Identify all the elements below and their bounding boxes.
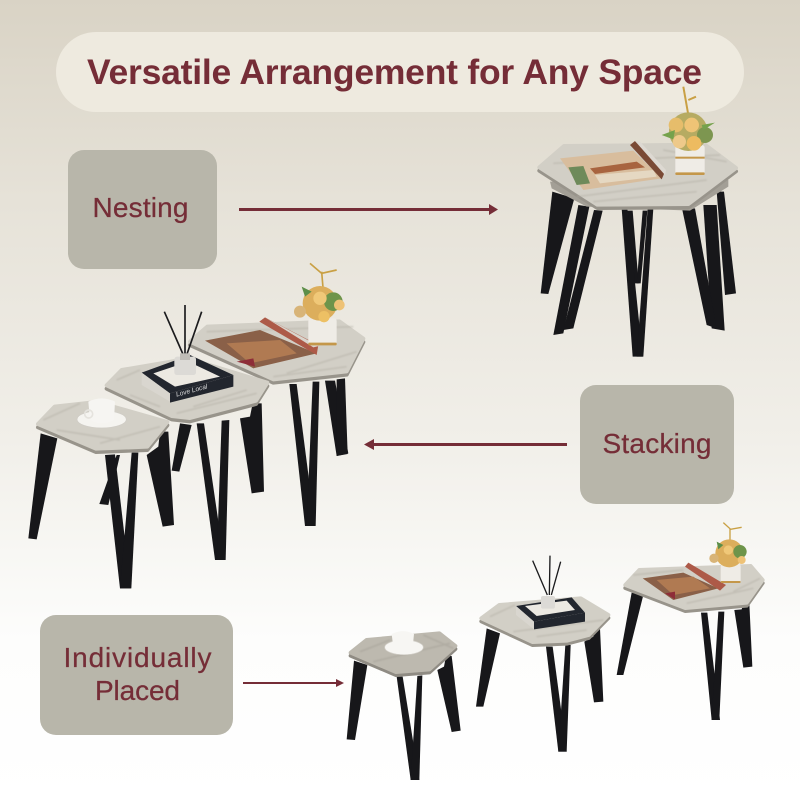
coffee cup bbox=[77, 398, 126, 428]
label: Stacking: Stacking bbox=[602, 428, 712, 459]
small table top bbox=[38, 402, 167, 449]
wood grain bbox=[553, 150, 727, 202]
photo: nested tables bbox=[539, 87, 736, 357]
table A top bbox=[351, 633, 455, 672]
medium table legs bbox=[172, 403, 264, 560]
label: Individually Placed bbox=[40, 615, 233, 735]
medium table top bbox=[107, 359, 267, 418]
small table grain bbox=[43, 403, 160, 443]
small table edge bbox=[38, 405, 167, 452]
reed diffuser bbox=[533, 556, 561, 609]
photo: stacked tables in a row bbox=[28, 263, 363, 588]
table B top bbox=[481, 598, 608, 642]
table A legs bbox=[347, 656, 461, 780]
table B grain bbox=[490, 605, 603, 637]
arrow: stacking to tables bbox=[364, 439, 567, 450]
photo: tables individually placed bbox=[347, 523, 763, 780]
flower vase bbox=[294, 263, 345, 345]
magazine bbox=[560, 141, 666, 190]
small table legs bbox=[28, 432, 174, 588]
table C legs bbox=[617, 593, 752, 720]
book bbox=[142, 355, 233, 403]
arrow: nesting to stacked tables bbox=[239, 204, 498, 215]
flower vase bbox=[709, 523, 747, 583]
label: Nesting: Nesting bbox=[92, 192, 188, 223]
table C top bbox=[625, 566, 763, 608]
label: Individually Placed: Individually bbox=[64, 642, 212, 673]
magazine bbox=[205, 317, 319, 368]
title banner: Versatile Arrangement for Any Space bbox=[87, 52, 702, 92]
label: Nesting bbox=[68, 150, 217, 269]
table A edge bbox=[351, 636, 455, 675]
book bbox=[516, 597, 585, 629]
table B legs bbox=[476, 628, 603, 752]
large table grain bbox=[207, 327, 357, 377]
label: Stacking bbox=[580, 385, 734, 504]
table C edge bbox=[625, 569, 763, 611]
reed diffuser bbox=[164, 305, 202, 375]
medium table grain bbox=[117, 370, 257, 413]
arrow: individually placed to tables bbox=[243, 679, 344, 687]
flower vase bbox=[662, 87, 715, 175]
medium table edge bbox=[107, 362, 267, 421]
book: Love Local bbox=[175, 383, 209, 399]
large table legs bbox=[289, 378, 348, 526]
coffee cup bbox=[385, 631, 423, 655]
table A grain bbox=[360, 635, 453, 662]
lower table top bbox=[550, 180, 728, 211]
label: Individually Placed: Placed bbox=[95, 675, 180, 706]
magazine bbox=[643, 563, 726, 600]
upper table top bbox=[539, 145, 736, 205]
upper table edge bbox=[539, 148, 736, 208]
table C grain bbox=[633, 570, 760, 603]
table legs bbox=[541, 192, 736, 357]
title banner bbox=[56, 32, 744, 112]
large table edge bbox=[190, 325, 363, 383]
table B edge bbox=[481, 601, 608, 645]
large table top bbox=[190, 321, 363, 379]
